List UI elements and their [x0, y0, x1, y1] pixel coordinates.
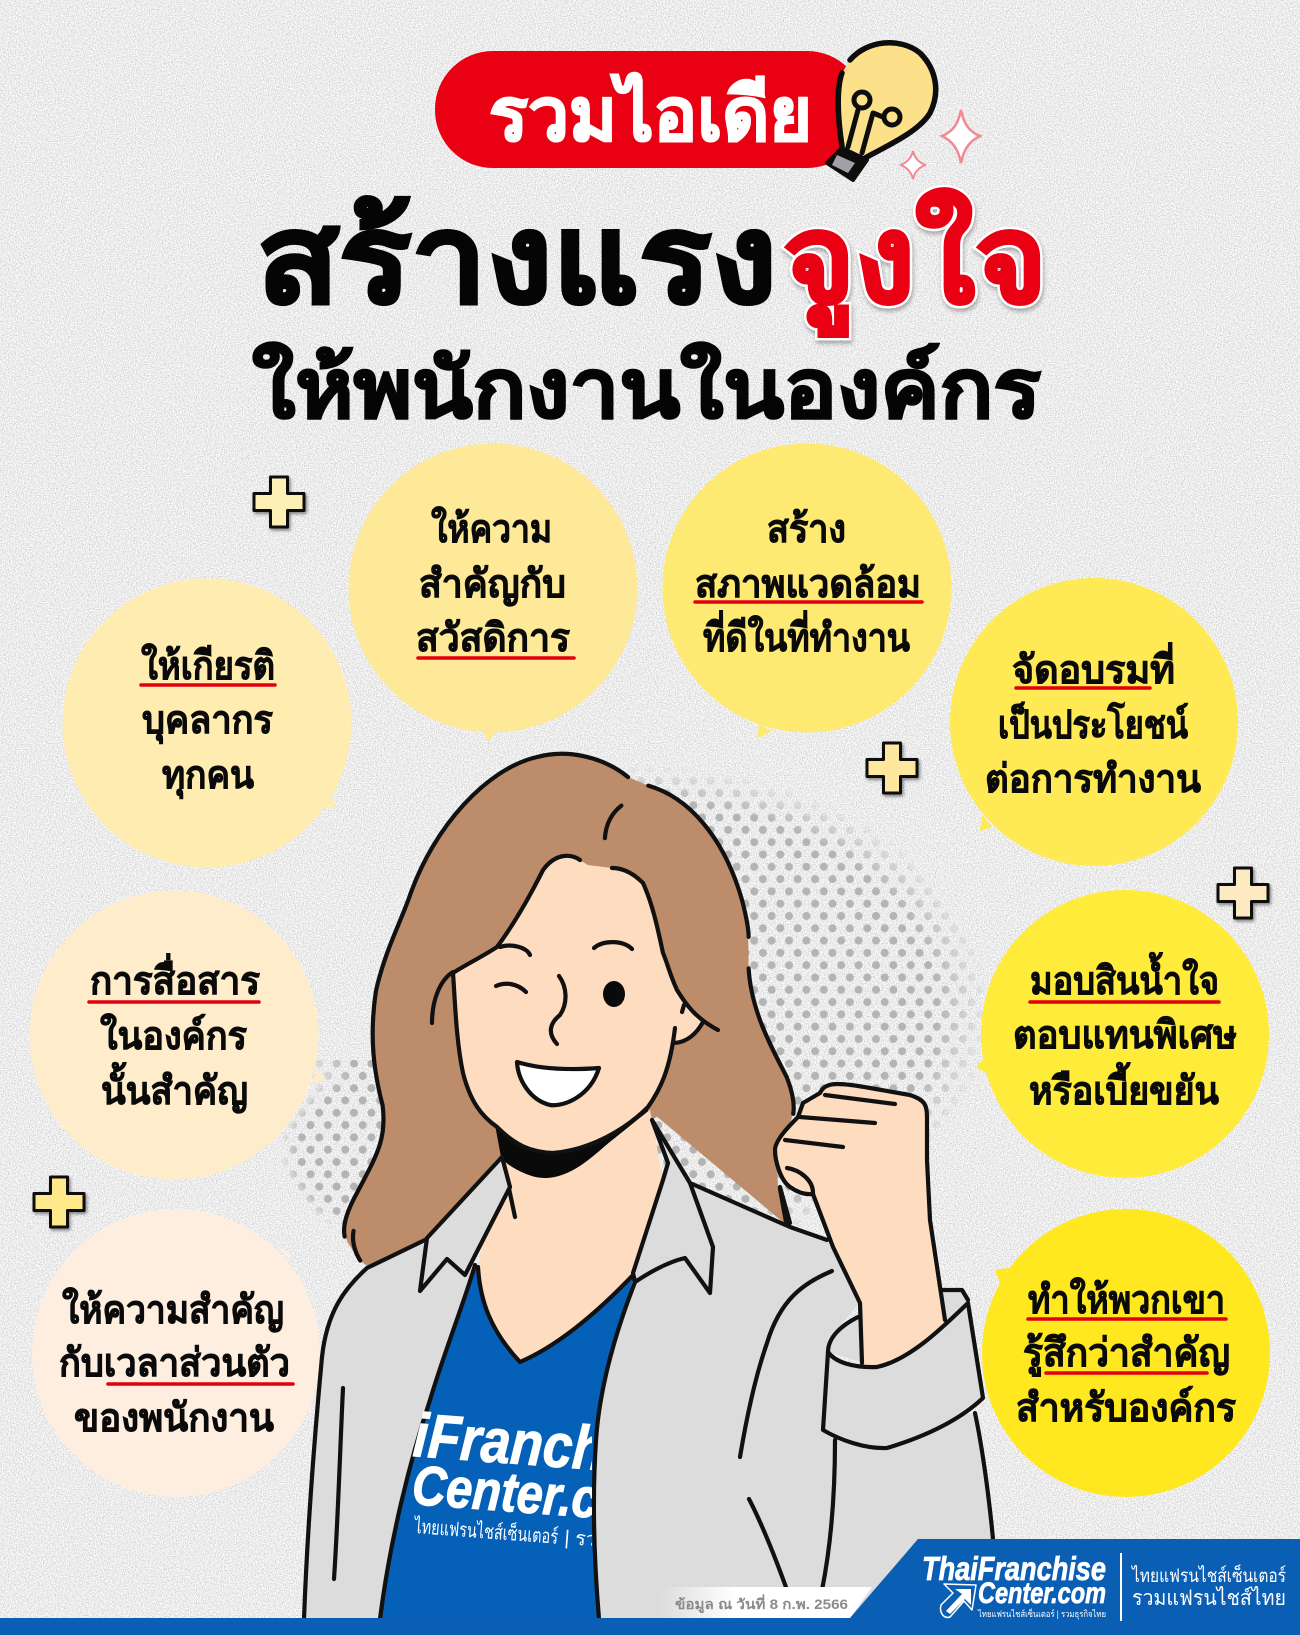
brand text line 2: รวมแฟรนไชส์ไทย — [1132, 1586, 1286, 1610]
hair — [344, 754, 794, 1268]
icon: light bulb — [827, 43, 936, 180]
speech bubble: personal time — [32, 1209, 320, 1497]
smile — [517, 1062, 599, 1105]
speech bubble: rewards — [976, 890, 1269, 1178]
speech bubble: rewards: หรือเบี้ยขยัน — [1029, 1062, 1219, 1113]
plus icon 3 — [1218, 868, 1268, 918]
eyebrows — [500, 942, 632, 955]
underline — [1016, 686, 1150, 690]
underline — [108, 1382, 293, 1386]
speech bubble: communication: ในองค์กร — [100, 1013, 247, 1058]
underline — [1028, 1317, 1226, 1321]
speech bubble: personal time: ให้ความสำคัญ — [62, 1287, 284, 1333]
jacket left collar — [420, 1157, 510, 1291]
raised arm and fist — [775, 1084, 945, 1366]
title line 2: ให้พนักงานในองค์กร — [252, 342, 1041, 435]
plus icon 1 — [254, 477, 304, 527]
speech bubble: feeling important — [982, 1209, 1270, 1497]
icon: sparkle large — [942, 110, 980, 163]
speech bubble: communication — [30, 890, 326, 1180]
shirt logo text — [412, 1411, 592, 1548]
title badge: red pill: รวมไอเดีย — [489, 71, 812, 156]
jacket right collar — [633, 1120, 713, 1293]
underline 2 — [1046, 1371, 1207, 1375]
plus icon 2 — [867, 743, 917, 793]
jacket left panel — [304, 1157, 510, 1619]
speech bubble: rewards: มอบสินน้ำใจ — [1030, 952, 1219, 1003]
source date label — [660, 1587, 872, 1618]
underline — [418, 656, 574, 660]
shirt logo text: | รวม — [564, 1527, 611, 1552]
speech bubble: honor: บุคลากร — [142, 699, 273, 744]
jacket right panel — [594, 1120, 999, 1619]
speech bubble: welfare — [348, 444, 638, 742]
speech bubble: welfare: สวัสดิการ — [416, 617, 570, 660]
blue shirt — [380, 1265, 636, 1619]
speech bubble: communication: การสื่อสาร — [90, 953, 260, 1003]
speech bubble: welfare: ให้ความ — [431, 506, 552, 551]
icon: logo arrow — [941, 1584, 976, 1617]
logo wordmark: ThaiFranchise — [922, 1550, 1106, 1587]
speech bubble: training: ต่อการทำงาน — [985, 758, 1201, 801]
speech bubble: feeling important: สำหรับองค์กร — [1016, 1385, 1236, 1430]
speech bubble: training: จัดอบรมที่ — [1012, 642, 1175, 692]
footer: logo band — [0, 1539, 1300, 1635]
finger lines — [785, 1095, 895, 1147]
speech bubble: environment: สภาพแวดล้อม — [695, 563, 921, 606]
open eye — [603, 981, 625, 1007]
underline — [695, 600, 922, 604]
speech bubble: communication: นั้นสำคัญ — [101, 1062, 248, 1114]
shirt logo text: iFranch — [411, 1401, 608, 1484]
speech bubble: honor — [62, 578, 352, 868]
title line 1: จูงใจ — [783, 189, 1047, 336]
speech bubble: welfare: สำคัญกับ — [419, 563, 566, 607]
neck shadow — [497, 1110, 648, 1177]
title line 1: สร้างแรง — [257, 191, 777, 329]
speech bubble: honor: ให้เกียรติ — [141, 643, 275, 688]
neck line — [503, 1160, 515, 1217]
speech bubble: personal time: ของพนักงาน — [74, 1397, 274, 1440]
speech bubble: environment: สร้าง — [767, 508, 846, 551]
speech bubble: environment: ที่ดีในที่ทำงาน — [703, 610, 910, 660]
shirt logo text: Center.com — [410, 1453, 671, 1535]
speech bubble: training — [950, 578, 1238, 866]
logo tagline: ไทยแฟรนไชส์เซ็นเตอร์ | รวมธุรกิจไทย — [977, 1607, 1106, 1620]
logo wordmark line 2: Center.com — [978, 1577, 1106, 1610]
title badge: red pill — [435, 51, 865, 168]
divider — [1120, 1553, 1122, 1621]
winking eye — [496, 984, 526, 992]
face — [432, 856, 718, 1217]
source date label: ข้อมูล ณ วันที่ 8 ก.พ. 2566 — [675, 1594, 848, 1613]
thumb nail — [787, 1168, 813, 1193]
plus icon 4 — [34, 1177, 84, 1227]
speech bubble: personal time: กับเวลาส่วนตัว — [59, 1342, 290, 1385]
jacket folds — [740, 1271, 832, 1457]
underline — [1030, 1000, 1219, 1004]
speech bubble: training: เป็นประโยชน์ — [998, 701, 1188, 747]
halftone dot circle — [282, 769, 983, 1226]
icon: sparkle small — [901, 151, 925, 179]
speech bubble: rewards: ตอบแทนพิเศษ — [1013, 1014, 1237, 1057]
character: woman winking with raised fist — [304, 754, 999, 1619]
title line 1 — [257, 189, 1047, 336]
speech bubble: feeling important: ทำให้พวกเขา — [1028, 1277, 1225, 1322]
jacket cuff — [823, 1303, 983, 1448]
underline — [89, 1000, 259, 1004]
speech bubble: environment — [662, 444, 952, 739]
shirt logo text: ไทยแฟรนไชส์เซ็นเตอร์ — [412, 1513, 559, 1549]
speech bubble: honor: ทุกคน — [162, 754, 254, 799]
underline — [141, 683, 275, 687]
title line 1: จูงใจ — [783, 189, 1047, 336]
nose — [551, 976, 566, 1044]
sleeve inner — [828, 1290, 968, 1367]
neck and chest skin — [478, 1110, 663, 1362]
speech bubble: feeling important: รู้สึกว่าสำคัญ — [1023, 1332, 1230, 1377]
